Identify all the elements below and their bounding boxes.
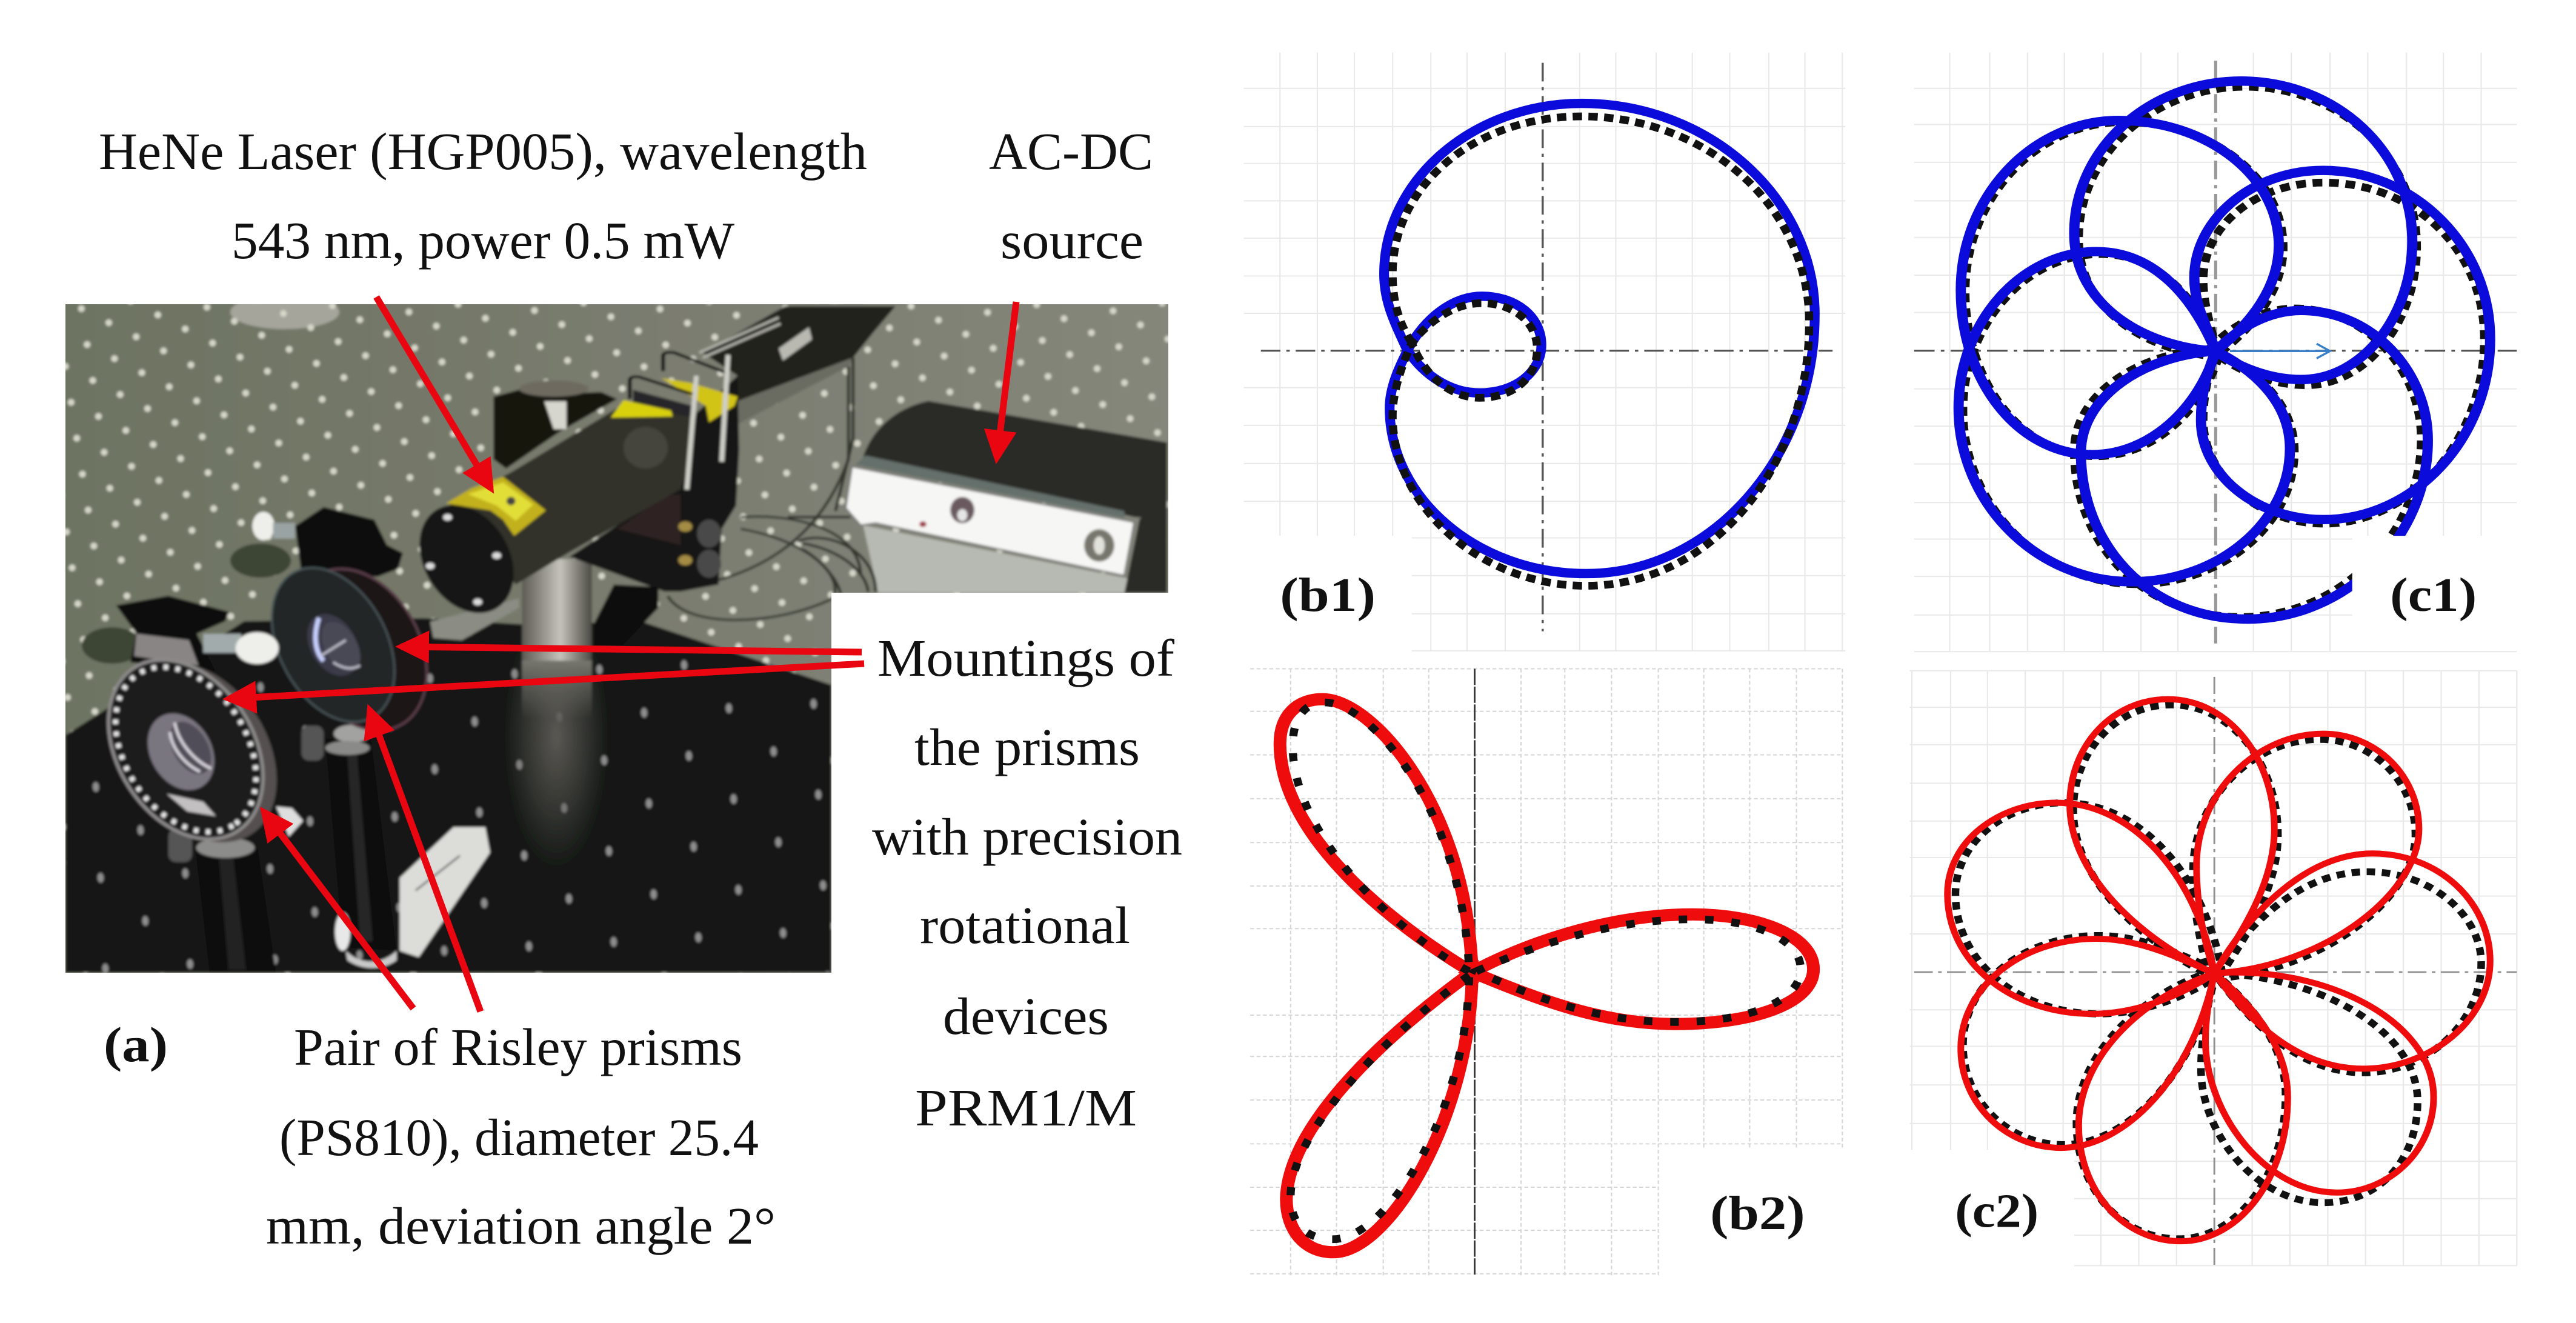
grid c1 — [1914, 53, 2517, 652]
label: pair of Risley prisms: Pair of Risley prisms — [294, 1018, 742, 1076]
red measured curve b2 — [1280, 699, 1814, 1252]
blue measured curves c1 — [1959, 81, 2490, 619]
blue measured curve b1 — [1384, 104, 1815, 573]
arrow: to HeNe laser — [376, 297, 491, 488]
axes b1 — [1261, 63, 1832, 632]
light blue arrow c1 — [2230, 344, 2330, 358]
black dashed simulated curves c1 — [1963, 87, 2484, 617]
label: mountings of the prisms: with precision — [872, 807, 1182, 866]
arrow: to front mounting — [228, 664, 864, 699]
black dashed simulated curve b2 — [1291, 702, 1801, 1239]
label: pair of Risley prisms: mm, deviation angle 2° — [266, 1196, 776, 1255]
label: mountings of the prisms: devices — [943, 987, 1109, 1045]
label: panel a: (a) — [104, 1017, 168, 1072]
label: mountings of the prisms: rotational — [920, 896, 1130, 955]
label b2: (b2) — [1710, 1187, 1805, 1240]
vertical axis b2 — [1474, 668, 1476, 1276]
black dashed simulated curves c2 — [1955, 705, 2481, 1239]
panel c2: red seven-petal chart — [1909, 671, 2517, 1268]
arrow: to rear mounting — [401, 647, 862, 652]
label: HeNe laser: 543 nm, power 0.5 mW — [231, 211, 734, 270]
label c1: (c1) — [2390, 568, 2477, 621]
label: AC-DC source: AC-DC — [989, 122, 1153, 181]
label: mountings of the prisms: the prisms — [914, 718, 1140, 776]
grid c2 — [1909, 671, 2517, 1265]
front prism mount — [104, 595, 281, 973]
axes c1 — [1914, 349, 2517, 352]
panel b2: red three-petal chart — [1250, 668, 1842, 1276]
label c2: (c2) — [1955, 1184, 2039, 1238]
panel b1: blue limacon chart — [1244, 53, 1845, 652]
label b1: (b1) — [1280, 568, 1376, 622]
HeNe laser tube — [404, 352, 739, 645]
label: pair of Risley prisms: (PS810), diameter 25.4 — [279, 1108, 759, 1167]
black dashed simulated curve b1 — [1393, 116, 1809, 586]
red measured curves c2 — [1948, 699, 2490, 1241]
cables — [668, 367, 860, 620]
label: AC-DC source: source — [1000, 211, 1143, 270]
label: mountings of the prisms: PRM1/M — [915, 1078, 1137, 1137]
panel c1: blue five-petal chart — [1914, 53, 2519, 652]
rear prism mount — [247, 507, 490, 968]
laser post and top post — [430, 381, 617, 719]
arrow: to rear Risley prism — [370, 710, 481, 1011]
label: mountings of the prisms: Mountings of — [877, 628, 1174, 687]
axes c2 — [1914, 677, 2517, 1268]
arrow: to front Risley prism — [264, 811, 413, 1008]
AC-DC source box — [788, 358, 1167, 594]
label: HeNe laser: HeNe Laser (HGP005), wavelength — [99, 122, 867, 181]
optical table background — [61, 295, 1176, 979]
grid b1 — [1244, 53, 1845, 652]
panel a: photo of the experimental setup — [61, 295, 1176, 979]
grid b2 — [1250, 668, 1842, 1276]
rear of laser — [699, 306, 896, 424]
vertical axis c1 — [2214, 61, 2218, 644]
arrow: to AC-DC source — [997, 302, 1016, 458]
